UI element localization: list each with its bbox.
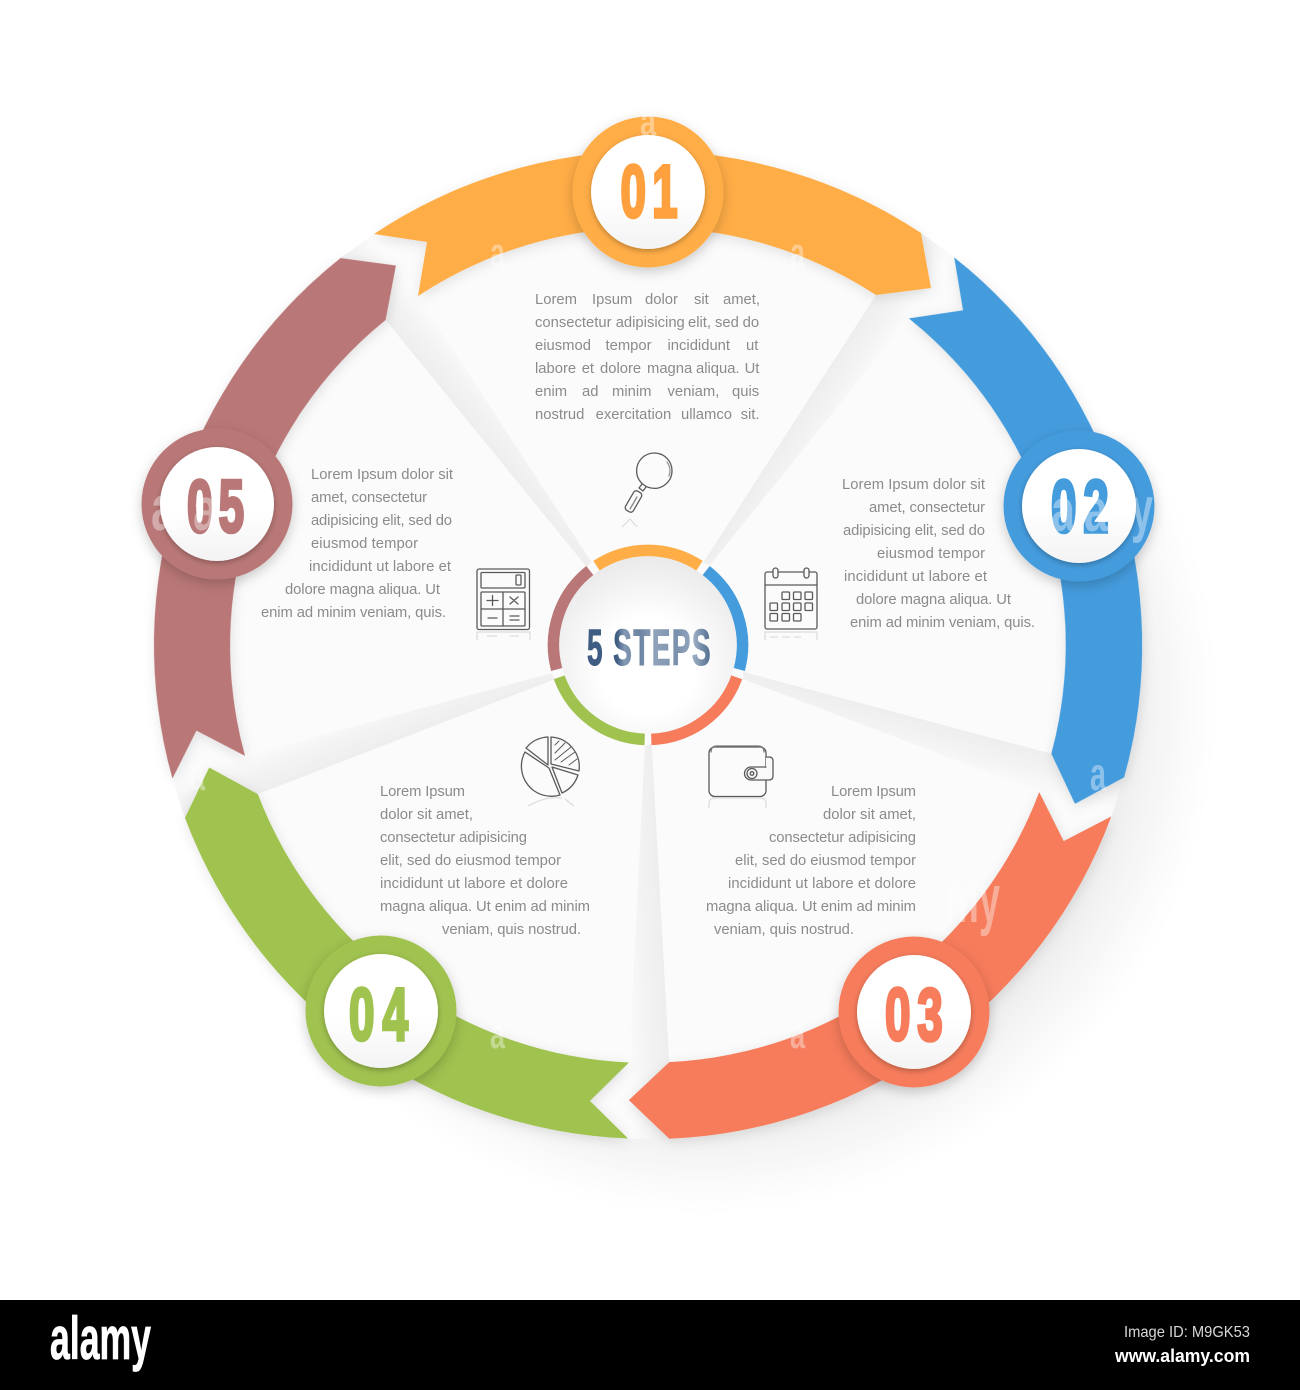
text block: step 1: nostrud (535, 407, 584, 423)
text block: step 1: adipisicing (616, 315, 685, 331)
panel separators and gaps between ribbons (151, 218, 1137, 1163)
watermark letters: my (945, 861, 1000, 937)
watermark letters: a (490, 1010, 505, 1057)
watermark letters: a (490, 229, 505, 276)
watermark letters: a (640, 100, 657, 144)
text block: step 1: elit, (688, 315, 711, 331)
text block: step 3: dolor sit amet, (823, 807, 916, 823)
text block: step 4: incididunt ut labore et dolore (380, 876, 568, 892)
footer logo: alamy (50, 1305, 151, 1372)
text block: step 1: Ut (745, 361, 759, 377)
footer image id: Image ID: M9GK53 (1124, 1324, 1250, 1341)
text block: step 1: ullamco (681, 407, 732, 423)
icon: magnifying glass (622, 453, 672, 527)
text block: step 3: veniam, quis nostrud. (714, 922, 854, 938)
watermark letters: a (193, 476, 218, 543)
text block: step 1: do (743, 315, 759, 331)
central disc background (228, 225, 1068, 1065)
text block: step 5: adipisicing elit, sed do (311, 513, 452, 529)
text block: step 5: amet, consectetur (311, 490, 427, 506)
watermark letters: y (1131, 475, 1153, 544)
text block: step 1: minim (612, 384, 651, 400)
text block: step 5: enim ad minim veniam, quis. (261, 605, 446, 621)
text block: step 1: ad (582, 384, 598, 400)
badge 03: 03 (885, 974, 943, 1057)
text block: step 1: amet, (723, 292, 760, 308)
text block: step 1: tempor (606, 338, 652, 354)
text block: step 1: labore (535, 361, 576, 377)
text block: step 2: Lorem Ipsum dolor sit (842, 477, 985, 493)
watermark letters: a (1084, 477, 1108, 544)
watermark letters: a (1090, 748, 1106, 800)
text block: step 4: dolor sit amet, (380, 807, 473, 823)
text block: step 1: incididunt (668, 338, 730, 354)
text block: step 5: eiusmod tempor (311, 536, 418, 552)
text block: step 3: incididunt ut labore et dolore (728, 876, 916, 892)
badge 01 (572, 116, 724, 268)
text block: step 2: amet, consectetur (869, 500, 985, 516)
centre title: 5 STEPS (587, 619, 712, 676)
centre hub coloured ring (553, 550, 743, 739)
text block: step 2: eiusmod tempor (877, 546, 985, 562)
text block: step 5: incididunt ut labore et (309, 559, 451, 575)
text block: step 1: exercitation (596, 407, 671, 423)
footer url: www.alamy.com (1114, 1346, 1250, 1366)
text block: step 1: sit (694, 292, 709, 308)
arrow: step 2 blue (895, 232, 1205, 806)
watermark letters: a (790, 229, 805, 276)
text block: step 1: dolor (645, 292, 678, 308)
badge 02 (1004, 430, 1154, 582)
icon: wallet (709, 746, 773, 808)
text block: step 4: consectetur adipisicing (380, 830, 527, 846)
badge 02: 02 (1051, 466, 1109, 549)
text block: step 2: dolore magna aliqua. Ut (856, 592, 1011, 608)
text block: step 1: dolore (600, 361, 641, 377)
badge 03 (838, 936, 990, 1088)
text block: step 1: et (582, 361, 594, 377)
text block: step 5: Lorem Ipsum dolor sit (311, 467, 453, 483)
watermark letters: a (790, 1010, 805, 1057)
text block: step 1: sed (715, 315, 739, 331)
text block: step 1: veniam, (668, 384, 719, 400)
arrow: step 4 green (129, 761, 665, 1206)
icon: calendar (765, 568, 817, 640)
text block: step 1: consectetur (535, 315, 612, 331)
watermark letters (151, 100, 1153, 1057)
text block: step 4: Lorem Ipsum (380, 784, 465, 800)
text block: step 5: dolore magna aliqua. Ut (285, 582, 440, 598)
icon: pie chart (521, 737, 579, 806)
text block: step 3: magna aliqua. Ut enim ad minim (706, 899, 916, 915)
text block: step 1: enim (535, 384, 567, 400)
text block: step 3: Lorem Ipsum (831, 784, 916, 800)
arrow ribbons ring (93, 151, 1205, 1211)
text block: step 2: adipisicing elit, sed do (843, 523, 985, 539)
text block: step 1: quis (732, 384, 759, 400)
text block: step 1: Ipsum (592, 292, 632, 308)
arrow: step 1 orange (374, 151, 931, 296)
icon: calculator (477, 569, 530, 640)
centre hub white disc (559, 556, 737, 734)
badge 05: 05 (187, 466, 244, 549)
footer bar (0, 1300, 1300, 1390)
badge 04: 04 (349, 974, 408, 1057)
text block: step 3 (706, 784, 916, 938)
watermark letters: a (151, 472, 176, 544)
text block: step 4: elit, sed do eiusmod tempor (380, 853, 561, 869)
text block: step 1: ut (746, 338, 758, 354)
badge 04 (306, 936, 456, 1086)
text block: step 4: veniam, quis nostrud. (442, 922, 581, 938)
watermark letters: a (1051, 477, 1075, 544)
badge 01: 01 (620, 151, 678, 234)
text block: step 2: incididunt ut labore et (844, 569, 987, 585)
arrow: step 5 maroon (93, 223, 404, 798)
text block: step 1: Lorem (535, 292, 577, 308)
text block: step 1: aliqua. (696, 361, 740, 377)
text block: step 4: magna aliqua. Ut enim ad minim (380, 899, 590, 915)
text block: step 3: consectetur adipisicing (769, 830, 916, 846)
long drop shadow of the ring (496, 552, 1168, 1165)
badge 05 (142, 428, 292, 580)
watermark letters: a (190, 748, 205, 800)
text block: step 3: elit, sed do eiusmod tempor (735, 853, 916, 869)
text block: step 1: eiusmod (535, 338, 591, 354)
text block: step 1: sit. (741, 407, 760, 423)
text block: step 4 (380, 784, 590, 938)
text block: step 5 (261, 467, 453, 621)
text block: step 2: enim ad minim veniam, quis. (850, 615, 1035, 631)
arrow: step 3 coral (624, 766, 1160, 1211)
text block: step 2 (842, 477, 1035, 631)
text block: step 1: magna (647, 361, 693, 377)
